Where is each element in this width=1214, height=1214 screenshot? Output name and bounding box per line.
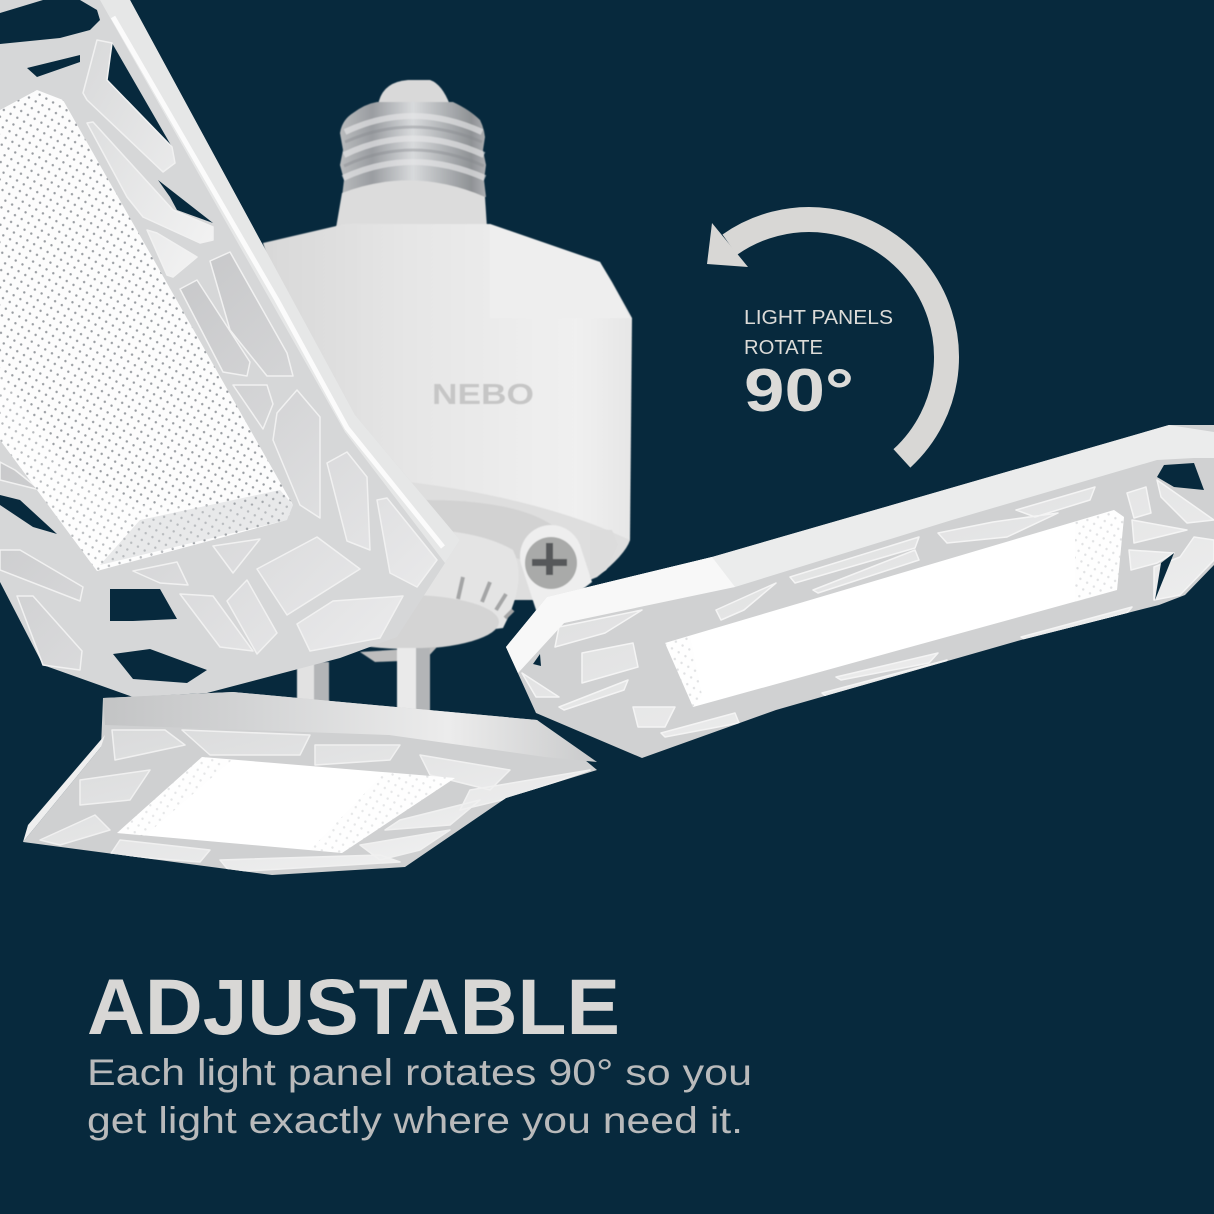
recesses	[40, 730, 590, 872]
description text	[87, 1052, 752, 1141]
lens	[665, 510, 1124, 707]
openings	[533, 463, 1204, 666]
lens with prism dots	[0, 90, 293, 571]
hub and support stems	[297, 529, 519, 720]
panel rim	[100, 0, 460, 563]
bottom light panel	[23, 692, 597, 875]
right light panel	[506, 425, 1214, 758]
top rim	[103, 692, 597, 762]
callout: panels rotate 90 degrees: ROTATE	[744, 337, 823, 359]
heading: ADJUSTABLE	[87, 962, 620, 1051]
callout: panels rotate 90 degrees: LIGHT PANELS	[744, 307, 893, 329]
lens	[117, 757, 455, 853]
mounting screw	[520, 525, 618, 618]
recessed ribs	[83, 40, 213, 277]
product: rotating LED garage light	[0, 0, 1214, 875]
left light panel	[0, 0, 460, 697]
rotation arrow	[707, 220, 947, 458]
description text: Each light panel rotates 90° so you	[87, 1052, 752, 1093]
top rim	[506, 425, 1214, 673]
NEBO logo: NEBO	[432, 379, 534, 411]
callout: panels rotate 90 degrees	[744, 307, 893, 424]
bulb screw base	[336, 80, 487, 228]
recesses	[522, 480, 1214, 737]
socket housing	[263, 224, 632, 600]
openings showing background	[0, 0, 213, 683]
callout: panels rotate 90 degrees: 90°	[744, 357, 854, 424]
description text: get light exactly where you need it.	[87, 1100, 743, 1141]
